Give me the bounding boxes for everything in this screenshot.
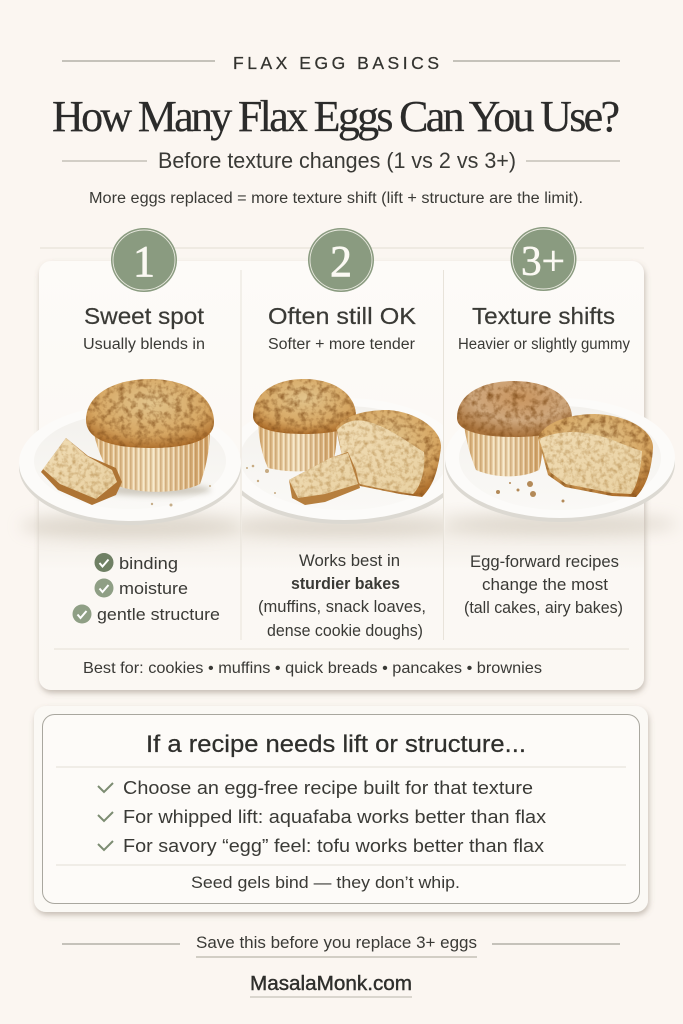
column 1 heading: Sweet spot [84,303,205,329]
column 3 note: change the most [482,576,608,594]
number badge 1: 1 [133,237,155,286]
column 3 note: Egg-forward recipes [470,553,619,571]
column 2 note [258,552,426,640]
column 2 heading: Often still OK [268,303,417,329]
column 3 subheading: Heavier or slightly gummy [458,336,630,353]
icon: check binding [94,553,114,572]
number badge 3+ [510,227,576,291]
photo: plate with darker muffin, dense halved muffin and crumbs [442,381,678,534]
number badge 3+: 3+ [521,239,565,285]
save prompt: Save this before you replace 3+ eggs [196,933,477,952]
photo: plate with whole muffin, halved muffin and piece [242,379,443,540]
column 2 note: Works best in [299,552,400,570]
column 2 note: sturdier bakes [291,575,400,593]
number badge 2 [308,228,374,292]
column 1 checklist [72,553,220,624]
column 3 note [464,553,623,617]
column 1 checklist: moisture [119,579,188,598]
column 1 checklist: gentle structure [97,605,220,624]
panel: if a recipe needs lift [34,706,648,912]
website brand: MasalaMonk.com [250,973,412,995]
intro line: More eggs replaced = more texture shift (lift + structure are the limit). [89,190,583,207]
column 1 checklist: binding [119,554,178,573]
panel: egg-count comparison card [39,261,644,690]
tip 2: For whipped lift: aquafaba works better than flax [123,806,547,827]
column 2 note: dense cookie doughs) [267,622,423,640]
tip 1: Choose an egg-free recipe built for that texture [123,777,533,798]
column 2 note: (muffins, snack loaves, [258,598,426,616]
column 2 subheading: Softer + more tender [268,336,415,353]
column dividers [241,270,444,640]
panel heading: If a recipe needs lift or structure... [146,731,526,758]
eyebrow heading: FLAX EGG BASICS [233,53,439,73]
number badge 2: 2 [330,237,352,286]
icon: check moisture [94,578,114,598]
column 1 subheading: Usually blends in [83,336,205,353]
divider above best-for row [54,648,629,650]
subtitle: Before texture changes (1 vs 2 vs 3+) [158,148,516,173]
tip 3: For savory “egg” feel: tofu works better than flax [123,835,545,856]
column 3 heading: Texture shifts [472,303,615,329]
number badge 1 [111,228,177,292]
title: How Many Flax Eggs Can You Use? [52,92,620,141]
icon: check gentle structure [72,604,92,624]
panel takeaway: Seed gels bind — they don’t whip. [191,873,460,892]
photo: plate with one muffin and a small piece [19,379,244,538]
divider above the cards [40,247,644,249]
column 3 note: (tall cakes, airy bakes) [464,599,623,617]
best for row: Best for: cookies • muffins • quick breads • pancakes • brownies [83,660,542,677]
